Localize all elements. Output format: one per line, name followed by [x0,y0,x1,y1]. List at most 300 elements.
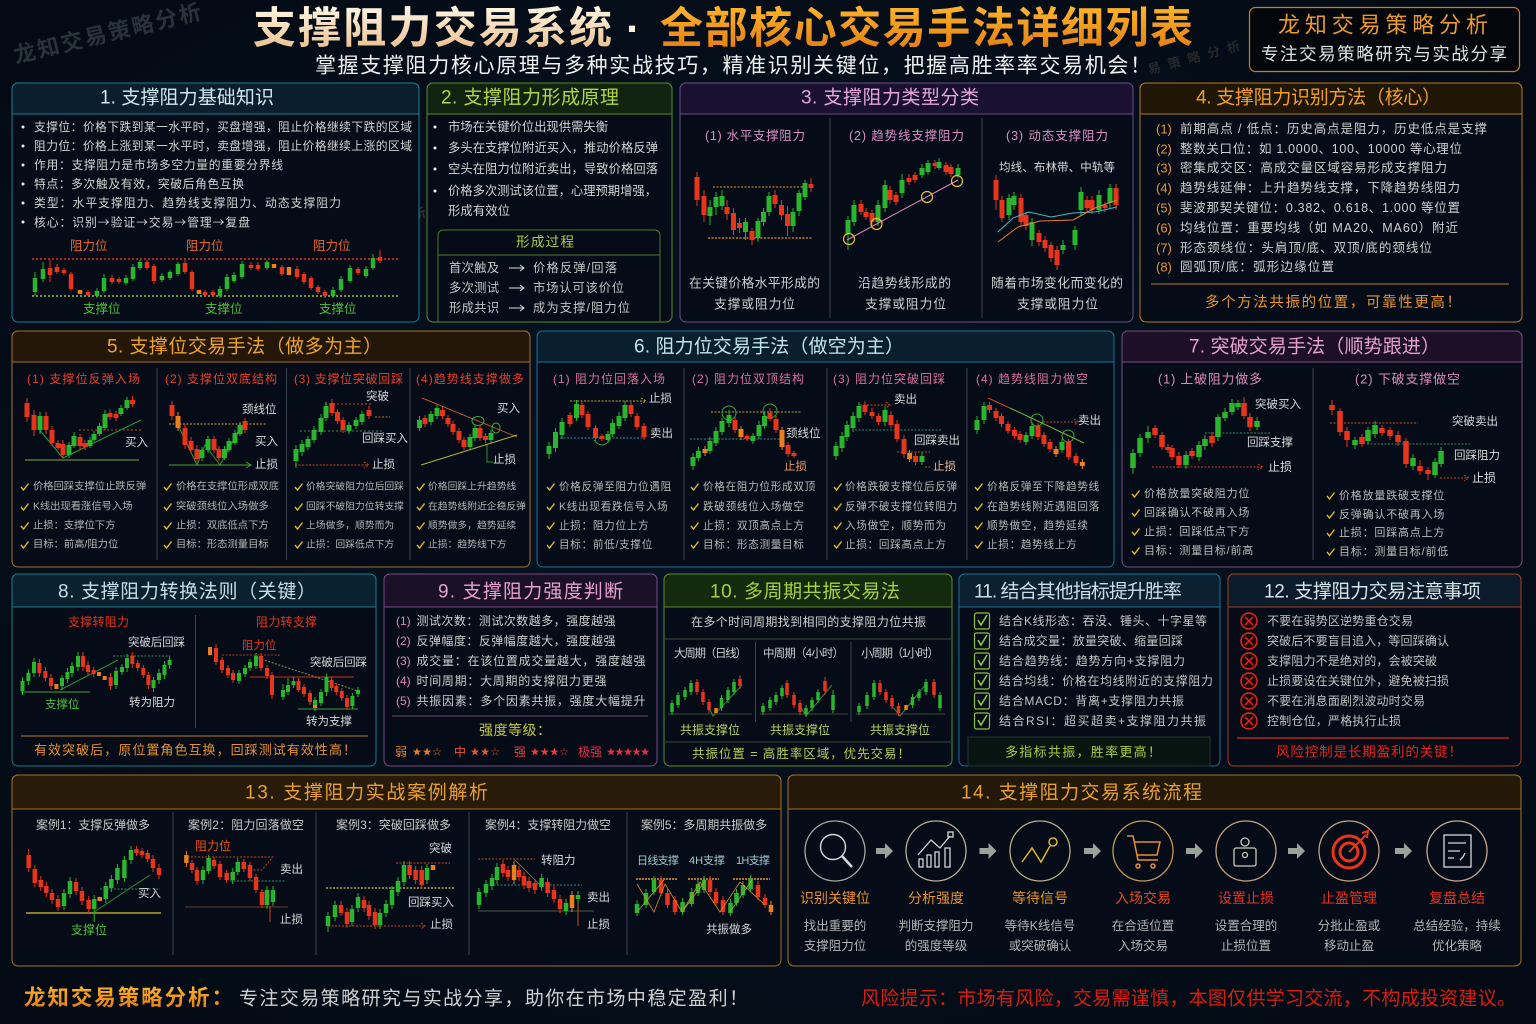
panel: 7 breakout trading [1122,331,1522,567]
text block: indicator checklist: 结合K线形态：吞没、锤头、十字星等 [999,613,1207,628]
chart: support bounce entry [25,371,148,460]
text block: step descriptions: 支撑阻力位 [804,938,866,953]
icon: magnifier [805,821,865,881]
text block: support method checklist: 止损：回踩低点下方 [306,538,394,550]
text block: support method checklist: 在趋势线附近企稳反弹 [428,500,526,512]
text block: resistance method checklist: 止损：阻力位上方 [559,519,649,532]
heading: panel 5: 5. 支撑位交易手法（做多为主） [107,336,382,358]
text block: strength list: 成交量：在该位置成交量越大，强度越强 [416,653,646,668]
text block: numbered methods: 趋势线延伸：上升趋势线支撑，下降趋势线阻力 [1180,180,1460,195]
text block: breakout checklist: 止损：回踩高点上方 [1339,525,1445,539]
title [253,5,1193,53]
icon: stop loss lock [1216,821,1276,881]
callout: panel 11: 多指标共振，胜率更高！ [1005,744,1161,760]
text block: step descriptions: 判断支撑阻力 [898,918,974,933]
chart: support bounce entry: (1) 支撑位反弹入场 [27,371,140,386]
text block: formation list: 空头在阻力位附近卖出，导致价格回落 [448,161,658,176]
text block: numbered methods: (1) [1156,122,1172,136]
text block: resistance method checklist: 目标：前低/支撑位 [559,538,653,551]
sub-panel: formation process: 价格反弹/回落 [533,260,617,275]
chart: trendline support resistance: (2) 趋势线支撑阻力 [849,128,964,143]
chart: case 4: 案例4：支撑转阻力做空 [485,817,611,832]
text block: breakout checklist: 价格放量跌破支撑位 [1339,488,1445,502]
footer: brand slogan [24,985,748,1010]
chart: case 3 [326,817,455,932]
text block: numbered methods: 密集成交区：高成交量区域容易形成支撑阻力 [1180,160,1447,175]
callout: panel 11 [968,737,1210,766]
chart: case 1: 案例1：支撑反弹做多 [36,817,150,832]
chart: upside breakout long: (1) 上破阻力做多 [1158,372,1262,386]
watermark: top left: 龙知交易策略分析 [11,0,204,68]
chart: support breakout retest [294,371,408,471]
text block: strength grades: ★★★☆ [530,746,569,758]
text block: basics list: 支撑位：价格下跌到某一水平时，买盘增强，阻止价格继续下跌的区域 [34,120,412,134]
panel: 6 resistance trading [537,331,1114,567]
text block: basics list: 核心：识别→验证→交易→管理→复盘 [34,214,250,230]
icon: review document [1427,821,1487,881]
text block: caution list: 止损要设在关键位外，避免被扫损 [1267,673,1449,688]
chart: support turns resistance: 突破后回踩 [128,635,186,649]
chart: downside breakdown short [1330,372,1500,485]
text block: support method checklist: 回踩不破阻力位转支撑 [306,500,404,512]
heading: panel 14: 14. 支撑阻力交易系统流程 [961,782,1202,804]
chart: trendline resistance short: (4) 趋势线阻力做空 [976,371,1088,386]
heading: panel 11: 11. 结合其他指标提升胜率 [974,580,1182,602]
text block: indicator checklist: 结合趋势线：趋势方向+支撑阻力 [999,653,1185,668]
text block: resistance method checklist: 跌破颈线位入场做空 [703,500,805,513]
chart: case 4: 转阻力 [541,853,576,867]
callout: panel 10: 共振位置 = 高胜率区域，优先交易！ [692,746,910,761]
text block: formation list [434,119,658,218]
text block: basics list: 特点：多次触及有效，突破后角色互换 [34,177,244,191]
text block: resistance method checklist [547,480,1100,551]
chart: support breakout retest: (3) 支撑位突破回踩 [294,371,403,386]
text block: intro: 在多个时间周期找到相同的支撑阻力位共振 [691,614,926,629]
chart: case 1: 买入 [138,887,161,900]
chart: resistance turns support: 阻力位 [242,638,276,652]
chart: support breakout retest: 回踩买入 [362,432,408,445]
chart: downside breakdown short: 回踩阻力 [1454,449,1500,462]
chart: support turns resistance: 转为阻力 [129,695,175,709]
text block: support method checklist: 止损：支撑位下方 [33,518,115,532]
icon: signal line [1010,821,1070,881]
text block: step names: 等待信号 [1012,890,1068,906]
text block: strength grades [395,722,650,759]
chart: resistance breakout retest: 止损 [933,459,956,473]
brand box [1250,8,1520,72]
sub-panel: formation process: 首次触及 [449,261,499,275]
chart: case 1: 支撑位 [71,922,107,937]
sub-panel: formation process: 多次测试 [449,280,499,295]
chart: resistance turns support [210,614,368,728]
arrows: flow steps [876,843,1412,859]
chart: case 2: 案例2：阻力回落做空 [188,817,304,832]
chart: upside breakout long: 止损 [1268,460,1292,474]
text block: type descriptions [689,276,1123,312]
text block: indicator checklist: 结合均线：价格在均线附近的支撑阻力 [999,673,1213,688]
chart: case 5: 日线支撑 [637,853,679,867]
text block: step names: 设置止损 [1218,890,1274,906]
panel: 2 formation [427,83,672,322]
sub-panel: formation process [438,230,660,322]
text block: type descriptions: 支撑或阻力位 [714,296,795,312]
text block: support method checklist: 价格在支撑位形成双底 [176,480,279,492]
chart: trendline resistance short [976,371,1101,469]
chart: support and resistance range: 阻力位 [186,238,224,253]
chart: trendline support long: 买入 [497,402,520,415]
chart: support and resistance range [32,238,400,316]
text block: support method checklist: 目标：前高/阻力位 [33,538,118,550]
text block: numbered methods: 斐波那契关键位：0.382、0.618、1.000 等位置 [1180,200,1460,215]
sub-panel: formation process: 成为支撑/阻力位 [533,300,630,315]
chart: horizontal support resistance [697,128,813,245]
chart: downside breakdown short: (2) 下破支撑做空 [1355,372,1460,386]
chart: case 5: 1H支撑 [736,853,770,867]
text block: indicator checklist: 结合MACD：背离+支撑阻力共振 [999,693,1184,708]
footer: brand slogan: 龙知交易策略分析： [24,985,233,1010]
text block: resistance method checklist: 止损：趋势线上方 [987,538,1077,551]
text block: numbered methods: 圆弧顶/底：弧形边缘位置 [1180,259,1334,274]
chart: double bottom: (2) 支撑位双底结构 [165,371,277,386]
chart: resistance rejection entry [549,371,673,459]
chart: support and resistance range: 支撑位 [205,301,243,316]
text block: basics list: 作用：支撑阻力是市场多空力量的重要分界线 [34,158,283,172]
title: 全部核心交易手法详细列表 [660,5,1193,53]
chart: upside breakout long: 突破买入 [1255,397,1301,411]
chart: resistance turns support: 阻力转支撑 [256,614,317,629]
chart: double bottom: 颈线位 [242,402,276,416]
text block: caution list: 控制仓位，严格执行止损 [1267,713,1401,728]
text block: step descriptions: 总结经验，持续 [1413,918,1501,933]
watermark: panel 1: 龙知交易策略分析 [302,205,427,247]
chart: double top: 止损 [784,459,807,473]
text block: support method checklist: 突破颈线位入场做多 [176,500,269,512]
text block: resistance method checklist: 在趋势线附近遇阻回落 [987,500,1100,513]
heading: panel 3: 3. 支撑阻力类型分类 [801,86,979,108]
chart: case 3: 案例3：突破回踩做多 [336,817,451,832]
text block: breakout checklist: 反弹确认不破再入场 [1339,507,1445,521]
chart: downside breakdown short: 止损 [1472,471,1496,485]
text block: step descriptions: 在合适位置 [1112,918,1174,933]
text block: caution list: 不要在消息面剧烈波动时交易 [1267,693,1425,708]
brand box: 专注交易策略研究与实战分享 [1261,44,1507,64]
text block: breakout checklist: 目标：测量目标/前高 [1144,543,1254,557]
text block: resistance method checklist: 目标：形态测量目标 [703,538,805,551]
chart: resistance rejection entry: (1) 阻力位回落入场 [553,371,665,386]
text block: numbered methods: (2) [1156,142,1172,156]
heading: panel 13: 13. 支撑阻力实战案例解析 [245,782,488,804]
text block: numbered methods: (8) [1156,260,1172,274]
chart: case 4: 卖出 [587,890,610,904]
text block: step descriptions: 找出重要的 [804,918,866,933]
text block: formation list: 市场在关键价位出现供需失衡 [448,119,608,134]
text block: strength list: (3) [396,654,411,668]
chart: support bounce entry: 买入 [125,436,148,449]
text block: basics list: 类型：水平支撑阻力、趋势线支撑阻力、动态支撑阻力 [34,196,341,210]
text block: caution list [1241,613,1449,729]
text block: breakout checklist [1132,486,1449,558]
text block: step names: 分析强度 [908,890,964,906]
chart: resistance breakout retest: 卖出 [894,392,917,406]
text block: resistance method checklist: 价格反弹至下降趋势线 [987,480,1100,493]
icon: target [1319,821,1379,881]
heading: panel 8: 8. 支撑阻力转换法则（关键） [58,580,316,602]
text block: support method checklist [21,480,526,550]
panel: 10 multi-timeframe [664,574,952,766]
chart: resistance turns support: 转为支撑 [306,714,352,728]
chart: support and resistance range: 支撑位 [83,301,121,316]
chart: support and resistance range: 阻力位 [70,238,108,253]
text block: numbered methods: 整数关口位：如 1.0000、100、10000 等心理位 [1180,141,1462,156]
callout: panel 4: 多个方法共振的位置，可靠性更高！ [1205,294,1461,311]
chart: case 5 [636,817,771,936]
chart: trendline resistance short: 卖出 [1078,413,1101,427]
chart: trendline support long: (4)趋势线支撑做多 [416,371,524,386]
text block: strength list: (2) [396,634,411,648]
chart: case 4 [478,817,611,931]
text block: resistance method checklist: 价格反弹至阻力位遇阻 [559,480,672,493]
heading: panel 1: 1. 支撑阻力基础知识 [100,86,274,108]
heading: panel 9: 9. 支撑阻力强度判断 [438,580,623,602]
text block: type descriptions: 沿趋势线形成的 [858,276,951,290]
heading: panel 4: 4. 支撑阻力识别方法（核心） [1196,86,1441,108]
chart: case 2: 卖出 [280,862,303,876]
text block: type descriptions: 随着市场变化而变化的 [991,276,1123,290]
text block: step names [800,890,1485,906]
text block: step descriptions: 移动止盈 [1324,939,1374,953]
text block: resistance method checklist: 反弹不破支撑位转阻力 [845,500,958,513]
text block: step descriptions [804,918,1501,953]
text block: numbered methods: (6) [1156,220,1172,236]
panel: 5 support trading [12,331,530,567]
callout: panel 12: 风险控制是长期盈利的关键！ [1276,744,1462,760]
text block: step descriptions: 分批止盈或 [1318,918,1381,933]
text block: step names: 止盈管理 [1321,890,1377,906]
text block: support method checklist: 止损：双底低点下方 [176,518,269,532]
chart: support turns resistance: 支撑转阻力 [68,614,129,629]
text block: strength list: (4) [396,674,411,688]
panel: 9 strength [384,574,657,766]
text block: strength grades: 中 [454,744,466,759]
text block: support method checklist: 顺势做多，趋势延续 [428,518,516,532]
chart: 4 hour timeframe: 共振支撑位 [770,722,830,737]
chart: case 4: 止损 [587,917,610,931]
icon: shopping cart [1113,821,1173,881]
heading: panel 12: 12. 支撑阻力交易注意事项 [1264,580,1481,602]
chart: 1 hour timeframe: 小周期（1小时） [861,647,939,660]
chart: support and resistance range: 阻力位 [313,238,351,253]
text block: support method checklist: 价格回踩支撑位止跌反弹 [33,480,146,492]
subtitle: 掌握支撑阻力核心原理与多种实战技巧，精准识别关键位，把握高胜率率交易机会！ [315,54,1151,78]
chart: case 2 [184,817,304,926]
text block: strength list [396,613,646,708]
chart: double bottom: 止损 [255,457,278,471]
text block: strength grades: ★★☆ [412,746,442,758]
text block: resistance method checklist: K线出现看跌信号入场 [559,500,668,513]
text block: support method checklist: 止损：趋势线下方 [428,538,507,550]
text block: step descriptions: 优化策略 [1432,938,1482,953]
text block: support method checklist: 价格突破阻力位后回踩 [306,480,404,492]
chart: case 3: 突破 [429,841,452,855]
text block: formation list: 价格多次测试该位置，心理预期增强， [448,183,657,198]
text block: resistance method checklist: 止损：双顶高点上方 [703,519,805,532]
text block: resistance method checklist: 顺势做空，趋势延续 [987,519,1089,532]
panel: 8 role reversal [12,574,376,766]
chart: support and resistance range: 支撑位 [319,301,357,316]
title: 支撑阻力交易系统 [253,5,612,53]
text block: caution list: 突破后不要盲目追入，等回踩确认 [1267,633,1449,648]
chart: dynamic support resistance: (3) 动态支撑阻力 [1006,128,1108,143]
chart: resistance rejection entry: 卖出 [650,426,673,440]
text block: step descriptions: 设置合理的 [1215,918,1277,933]
text block: strength list: (5) [396,694,411,708]
panel: 11 indicators [959,574,1220,766]
callout: panel 8: 有效突破后，原位置角色互换，回踩测试有效性高！ [34,742,356,758]
text block: type descriptions: 在关键价格水平形成的 [689,276,820,290]
text block: resistance method checklist: 入场做空，顺势而为 [845,519,947,532]
text block: type descriptions: 支撑或阻力位 [1017,296,1098,312]
text block: numbered methods [1156,121,1487,274]
text block: caution list: 支撑阻力不是绝对的，会被突破 [1267,653,1437,668]
text block: numbered methods: (5) [1156,200,1172,216]
chart: dynamic support resistance [996,128,1117,270]
chart: support turns resistance: 支撑位 [45,697,80,711]
panel: 14 process flow [788,775,1521,966]
footer: risk warning: 风险提示：市场有风险，交易需谨慎，本图仅供学习交流，不构成投资建议。 [861,988,1516,1010]
icon: chart growth [906,821,966,881]
chart: daily timeframe: 共振支撑位 [680,722,740,737]
chart: case 3: 止损 [430,917,453,931]
text block: support method checklist: 目标：形态测量目标 [176,538,269,550]
chart: resistance breakout retest: (3) 阻力位突破回踩 [833,371,945,386]
text block: resistance method checklist: 价格在阻力位形成双顶 [703,480,816,493]
text block: numbered methods: 形态颈线位：头肩顶/底、双顶/底的颈线位 [1180,240,1432,255]
text block: support method checklist: 价格回踩上升趋势线 [428,480,516,492]
text block: indicator checklist: 结合RSI：超买超卖+支撑阻力共振 [999,713,1206,728]
text block: step descriptions: 的强度等级 [905,938,968,953]
text block: step descriptions: 或突破确认 [1009,938,1072,953]
text block: strength list: 测试次数：测试次数越多，强度越强 [416,613,616,628]
text block: strength grades: 强度等级： [479,722,551,738]
chart: dynamic support resistance: 均线、布林带、中轨等 [999,160,1115,174]
chart: case 5: 4H支撑 [689,853,725,867]
text block: numbered methods: (7) [1156,240,1172,256]
chart: 1 hour timeframe: 共振支撑位 [870,722,930,737]
text block: basics list [22,120,412,230]
text block: strength grades: ★★★★★ [606,746,650,758]
chart: 4 hour timeframe [760,647,848,737]
chart: 1 hour timeframe [856,647,945,737]
text block: numbered methods: 均线位置：重要均线（如 MA20、MA60）附近 [1180,220,1458,235]
sub-panel: formation process: 形成共识 [449,301,499,315]
chart: double top [690,371,820,473]
text block: step descriptions: 入场交易 [1118,938,1168,953]
text block: strength grades: 极强 [578,745,602,759]
text block: step descriptions: 等待K线信号 [1005,918,1075,933]
watermark: top middle: 易策略分析 [1146,38,1242,77]
heading: panel 2: 2. 支撑阻力形成原理 [441,86,619,108]
panel: 12 cautions [1228,574,1521,766]
heading: panel 10: 10. 多周期共振交易法 [710,580,900,602]
chart: double bottom: 买入 [255,435,278,448]
chart: case 1 [26,817,161,937]
chart: upside breakout long: 回踩支撑 [1247,435,1293,449]
text block: step descriptions: 止损位置 [1221,938,1271,953]
chart: resistance rejection entry: 止损 [649,391,672,405]
text block: resistance method checklist: 止损：回踩高点上方 [845,538,947,551]
text block: strength grades: 弱 [395,745,407,759]
text block: numbered methods: (4) [1156,180,1172,196]
text block: type descriptions: 支撑或阻力位 [865,296,946,312]
chart: double top: 颈线位 [786,426,820,440]
chart: trendline support resistance [844,128,964,250]
text block: step names: 入场交易 [1115,890,1171,906]
chart: double top: (2) 阻力位双顶结构 [692,371,804,386]
text block: breakout checklist: 价格放量突破阻力位 [1144,486,1250,500]
chart: case 2: 止损 [280,912,303,926]
panel: 3 types [680,83,1133,322]
text block: support method checklist: 上场做多，顺势而为 [306,518,394,532]
text block: strength grades: ★★☆ [470,746,500,758]
chart: support breakout retest: 止损 [372,457,395,471]
chart: resistance breakout retest [833,371,960,473]
heading: panel 7: 7. 突破交易手法（顺势跟进） [1189,336,1440,358]
title: · [626,5,640,53]
text block: strength list: (1) [396,614,411,628]
text block: basics list: 阻力位：价格上涨到某一水平时，卖盘增强，阻止价格继续上涨的区域 [34,139,412,153]
text block: numbered methods: (3) [1156,160,1172,176]
sub-panel: formation process: 形成过程 [516,234,574,250]
text block: strength list: 反弹幅度：反弹幅度越大，强度越强 [416,633,616,648]
text block: breakout checklist: 目标：测量目标/前低 [1339,544,1449,558]
text block: breakout checklist: 回踩确认不破再入场 [1144,505,1250,519]
text block: support method checklist: K线出现看涨信号入场 [33,500,133,512]
brand box: 龙知交易策略分析 [1278,12,1488,38]
sub-panel: formation process: 市场认可该价位 [533,280,624,295]
chart: daily timeframe: 大周期（日线） [674,646,747,660]
text block: strength grades: 强 [514,745,526,759]
panel: 1 basics [12,83,419,322]
chart: case 2: 阻力位 [195,838,231,853]
panel: 13 case studies [12,775,781,966]
chart: resistance breakout retest: 回踩卖出 [914,433,960,447]
chart: case 5: 共振做多 [706,922,752,936]
text block: strength list: 时间周期：大周期的支撑阻力更强 [416,673,606,688]
text block: strength list: 共振因素：多个因素共振，强度大幅提升 [416,693,646,708]
chart: trendline support long [416,371,524,466]
chart: support breakout retest: 突破 [366,389,389,403]
heading: panel 6: 6. 阻力位交易手法（做空为主） [634,336,904,358]
chart: 4 hour timeframe: 中周期（4小时） [763,647,844,660]
chart: upside breakout long [1133,372,1301,474]
chart: case 5: 案例5：多周期共振做多 [641,817,767,832]
text block: indicator checklist: 结合成交量：放量突破、缩量回踩 [999,633,1183,648]
chart: case 3: 回踩买入 [408,896,454,909]
text block: step names: 识别关键位 [800,890,870,906]
chart: trendline support long: 止损 [493,452,516,466]
footer: brand slogan: 专注交易策略研究与实战分享，助你在市场中稳定盈利！ [239,988,748,1010]
text block: indicator checklist [974,613,1213,729]
text block: breakout checklist: 止损：回踩低点下方 [1144,524,1250,538]
panel: 4 identification [1140,83,1522,322]
text block: caution list: 不要在弱势区逆势重仓交易 [1267,613,1413,628]
chart: daily timeframe [668,646,752,737]
chart: downside breakdown short: 突破卖出 [1452,414,1498,428]
chart: horizontal support resistance: (1) 水平支撑阻力 [705,128,805,143]
chart: resistance turns support: 突破后回踩 [310,655,368,669]
text block: resistance method checklist: 价格跌破支撑位后反弹 [845,480,958,493]
chart: support turns resistance [21,614,186,711]
